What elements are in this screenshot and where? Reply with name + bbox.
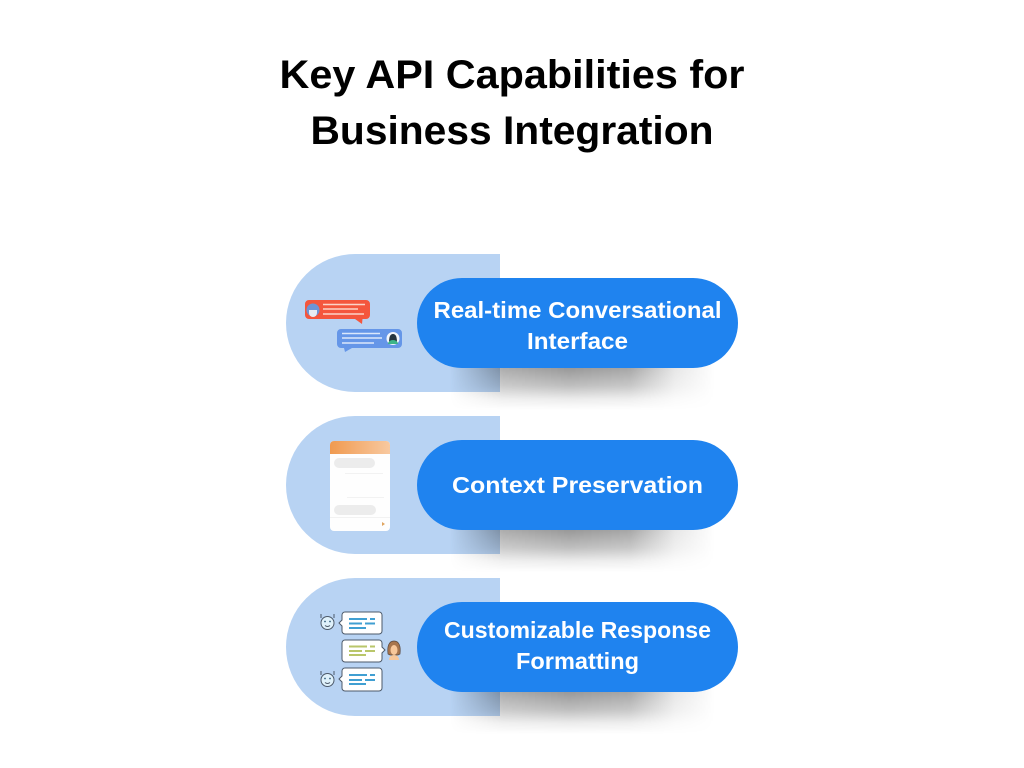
background shape 2 <box>286 416 500 554</box>
pill shadow 1 <box>455 368 702 405</box>
panel: customizable response formatting <box>286 578 738 739</box>
title: Business Integration <box>310 109 714 153</box>
panel: real-time conversational interface <box>286 254 738 415</box>
background shape 3 <box>286 578 500 716</box>
pill 3: Customizable Response <box>444 617 711 643</box>
pill 3 <box>417 602 738 692</box>
pill shadow 2 <box>455 530 702 567</box>
pill 2 <box>417 440 738 530</box>
pill shadow 3 <box>455 692 702 729</box>
icon: bot and human chat <box>321 612 400 691</box>
pill 1 <box>417 278 738 368</box>
pill 2: Context Preservation <box>452 472 703 498</box>
pill 1: Interface <box>527 328 628 354</box>
title <box>280 53 744 153</box>
icon: chat bubbles <box>305 300 402 352</box>
title: Key API Capabilities for <box>280 53 744 97</box>
icon: chat window <box>330 441 390 531</box>
background shape 1 <box>286 254 500 392</box>
pill 1: Real-time Conversational <box>434 297 722 323</box>
panel: context preservation <box>286 416 738 577</box>
pill 3: Formatting <box>516 648 639 674</box>
